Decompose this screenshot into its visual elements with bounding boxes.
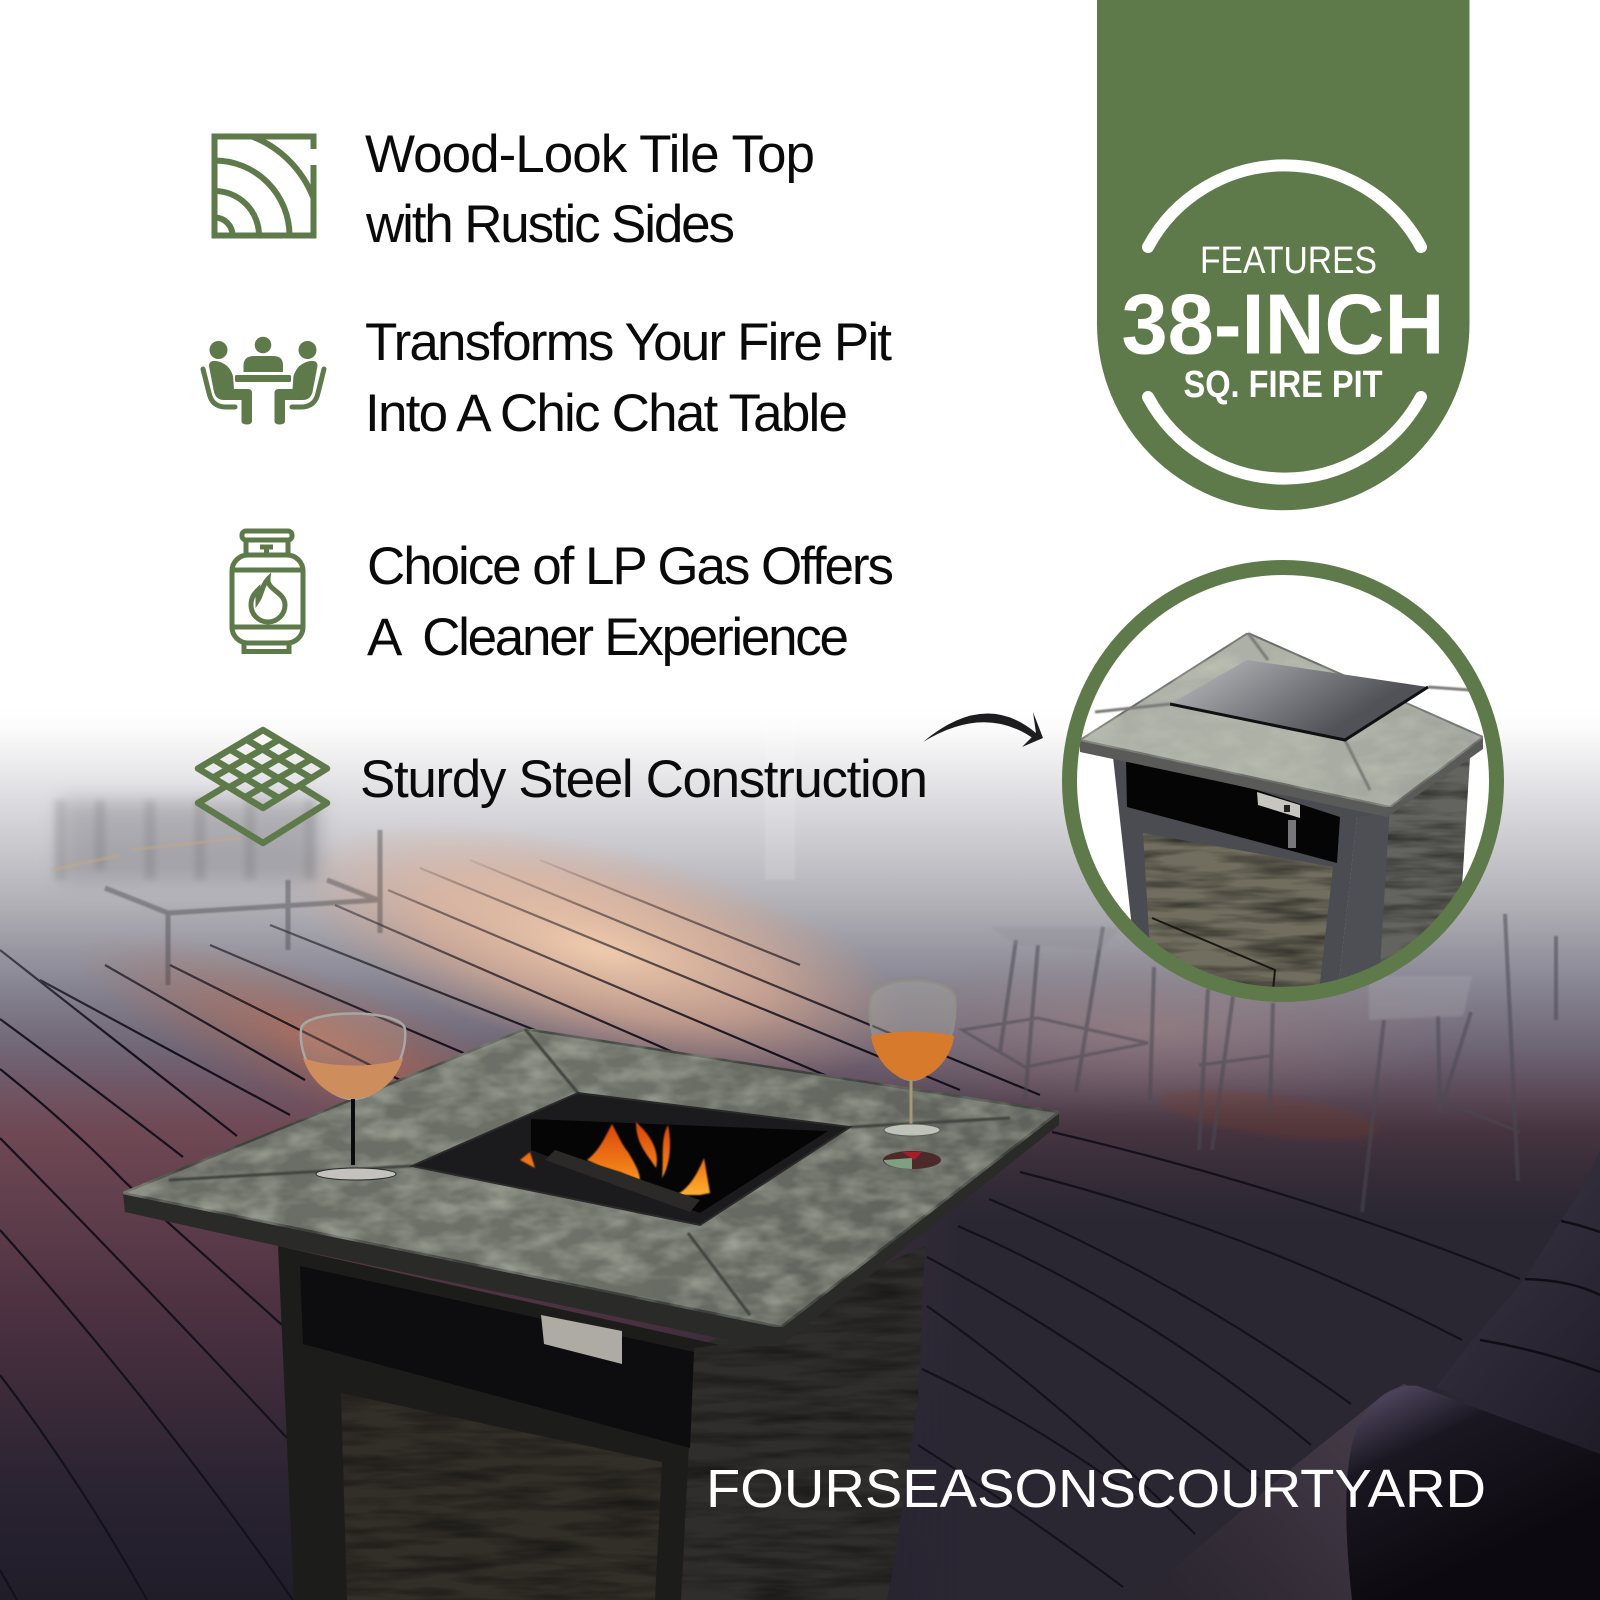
- banner label: features: FEATURES: [1200, 240, 1377, 282]
- inset green ring: [1070, 568, 1496, 994]
- fire pit base: front face: [278, 1246, 720, 1600]
- background furniture: left bench and rear chairs: [52, 715, 1556, 1212]
- background photo: patio deck at dusk: [0, 700, 1600, 1600]
- inset product photo: [1080, 633, 1483, 1000]
- text: LP gas: Choice of LP Gas Offers: [367, 537, 894, 596]
- gas control label: [541, 1315, 622, 1364]
- text: LP gas: A Cleaner Experience: [367, 608, 849, 667]
- text: chat table: Into A Chic Chat Table: [365, 384, 848, 443]
- fire pit base: right side: [681, 1246, 925, 1600]
- icon: steel grid layers: [198, 730, 327, 843]
- inset white backing: [1073, 571, 1493, 991]
- fire pit table in the foreground: [123, 1029, 1059, 1600]
- wine glass, left: [301, 1014, 405, 1180]
- flames: [520, 1122, 710, 1195]
- banner label: product: SQ. FIRE PIT: [1184, 364, 1382, 406]
- banner label: size: 38-INCH: [1122, 278, 1444, 372]
- panel: features banner: [1097, 0, 1470, 510]
- icon: wood-look tile: [214, 136, 314, 236]
- wine glass, right: [870, 980, 955, 1169]
- arrow to inset: [923, 712, 1043, 747]
- burner inner tray and log: [531, 1119, 828, 1213]
- icon: LP gas tank: [232, 531, 303, 652]
- fire pit wood panel: [341, 1393, 662, 1600]
- text: steel construction: Sturdy Steel Construction: [360, 750, 928, 809]
- tabletop stone surface: [123, 1029, 1059, 1327]
- icon: people at chat table: [203, 337, 324, 424]
- banner ring arcs: [1148, 165, 1421, 479]
- text: wood-look tile top: Wood-Look Tile Top: [365, 125, 815, 184]
- banner shape: [1097, 0, 1470, 510]
- tabletop miter lines: [169, 1029, 1010, 1315]
- text: chat table: Transforms Your Fire Pit: [365, 313, 892, 372]
- wordmark: FOURSEASONSCOURTYARD: [706, 1459, 1486, 1519]
- tabletop edge: [123, 1112, 1059, 1346]
- text: wood-look tile top: with Rustic Sides: [365, 195, 735, 254]
- burner opening: [412, 1093, 850, 1225]
- fire pit black vent panel: [300, 1266, 694, 1448]
- inset: fire pit with lid on: [1070, 568, 1496, 1000]
- leather sofa, bottom right: [1137, 1150, 1600, 1600]
